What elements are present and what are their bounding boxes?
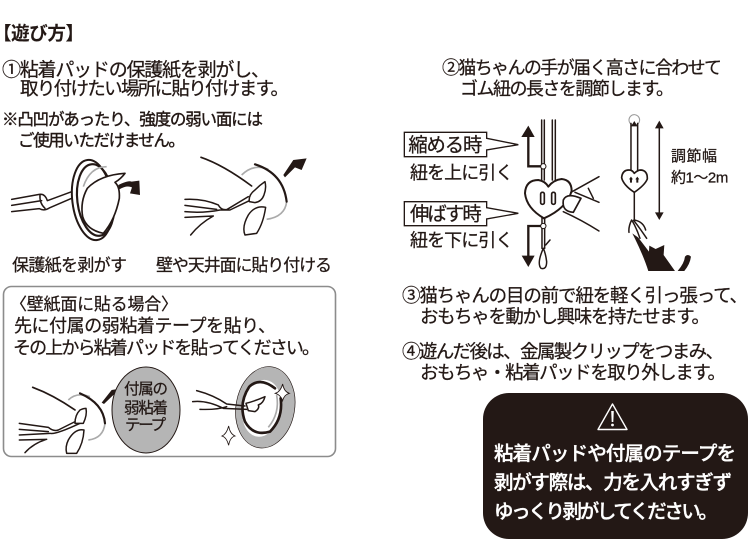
note: unsuitable surfaces: ご使用いただけません。 <box>18 131 185 150</box>
step 2 text <box>442 58 722 99</box>
label: lengthen: 伸ばす時 <box>410 204 482 226</box>
illustration: peeling protective paper <box>12 158 140 242</box>
caption: peel paper: 保護紙を剥がす <box>12 256 127 275</box>
step 1 text: ①粘着パッドの保護紙を剥がし、 <box>2 59 270 81</box>
heart stopper <box>525 179 572 218</box>
arrow: down <box>522 226 543 267</box>
caption: stick to wall or ceiling: 壁や天井面に貼り付ける <box>156 256 332 275</box>
panel: wallpaper surfaces <box>4 286 336 456</box>
warning text: 剥がす際は、力を入れすぎず <box>494 472 732 494</box>
tape callout: 付属の <box>124 380 168 398</box>
tape callout: 弱粘着 <box>124 399 168 417</box>
fingers <box>563 177 599 231</box>
label: shorten: 縮める時 <box>408 135 482 157</box>
icon: warning triangle <box>598 404 627 430</box>
step 4 text <box>402 341 726 383</box>
panel text <box>13 316 320 358</box>
range label: 約1～2m <box>671 169 728 186</box>
step 2 text: ②猫ちゃんの手が届く高さに合わせて <box>442 58 722 78</box>
step 4 text: ④遊んだ後は、金属製クリップをつまみ、 <box>402 341 724 362</box>
illustration: cord length with cat <box>622 115 728 271</box>
warning text: ゆっくり剥がしてください。 <box>494 501 718 523</box>
step 1 text: 取り付けたい場所に貼り付けます。 <box>20 78 289 99</box>
step 3 text <box>402 285 748 327</box>
warning text: 粘着パッドや付属のテープを <box>494 443 736 465</box>
range arrow <box>655 121 664 220</box>
panel heading: 〈壁紙面に貼る場合〉 <box>10 295 178 314</box>
step 4 text: おもちゃ・粘着パッドを取り外します。 <box>420 362 726 383</box>
cat silhouette <box>629 220 691 271</box>
range label <box>671 148 728 186</box>
panel text: 先に付属の弱粘着テープを貼り、 <box>14 316 276 336</box>
note: unsuitable surfaces <box>2 110 263 150</box>
panel text: その上から粘着パッドを貼ってください。 <box>13 338 320 358</box>
step 3 text: ③猫ちゃんの目の前で紐を軽く引っ張って、 <box>402 285 748 306</box>
tape callout: テープ <box>125 416 166 434</box>
illustration: cord adjustment labels and heart <box>404 120 599 269</box>
warning panel <box>483 393 748 539</box>
note: unsuitable surfaces: ※凸凹があったり、強度の弱い面には <box>2 110 263 129</box>
label: pull cord down: 紐を下に引く <box>410 231 513 251</box>
step 2 text: ゴム紐の長さを調節します。 <box>460 79 674 99</box>
illustration: pad on tape with sparkles <box>193 362 301 453</box>
warning text <box>494 443 736 523</box>
illustration: hand placing pad with tape <box>19 387 122 453</box>
range label: 調節幅 <box>671 148 717 165</box>
arrow: up <box>521 126 543 166</box>
illustration: sticking pad on wall <box>185 157 307 235</box>
cords <box>542 120 555 248</box>
step 1 text <box>2 59 289 99</box>
clip <box>539 240 550 269</box>
tape callout <box>112 367 180 453</box>
label: shorten <box>404 132 518 157</box>
label: pull cord up: 紐を上に引く <box>410 163 513 183</box>
step 3 text: おもちゃを動かし興味を持たせます。 <box>420 306 710 327</box>
label: lengthen <box>404 202 518 226</box>
